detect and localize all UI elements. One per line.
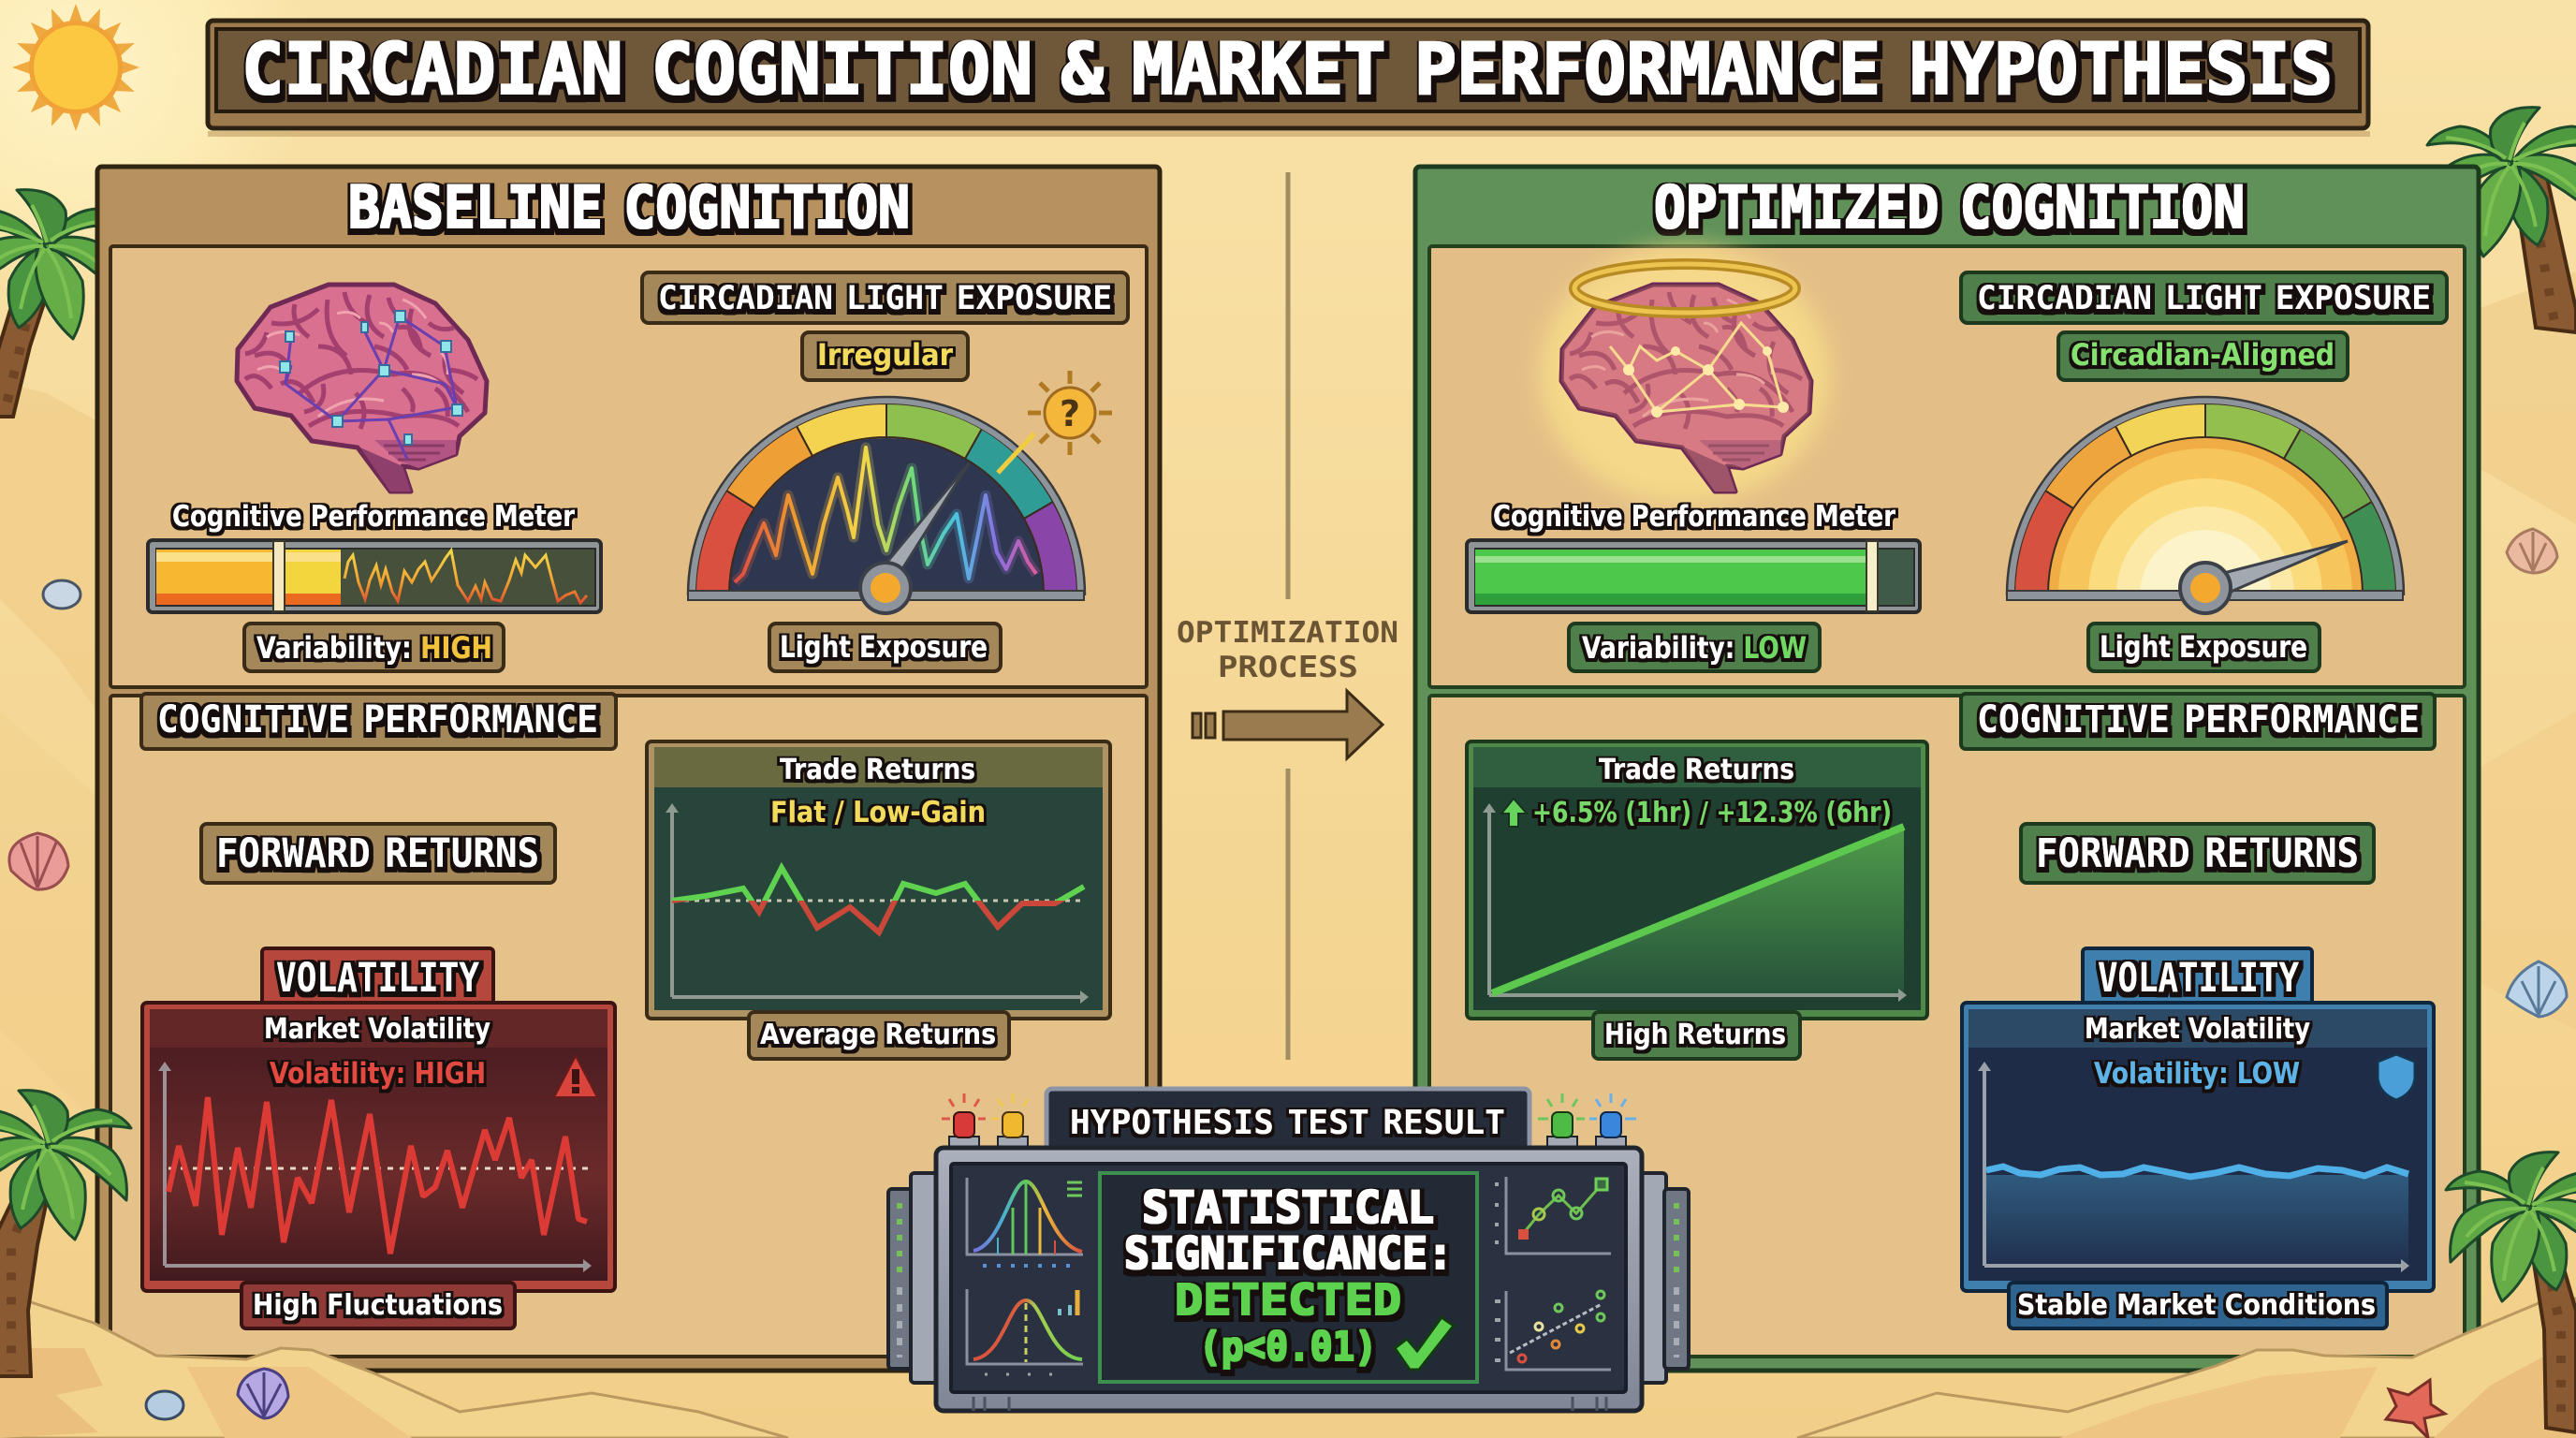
pill: high returns: High Returns [1604, 1019, 1786, 1051]
shell: blue-grey bottom [146, 1391, 183, 1419]
chart: market volatility low [1962, 1003, 2434, 1291]
statistical significance screen: DETECTED [1175, 1275, 1401, 1325]
chart: market volatility low: Volatility: LOW [2094, 1057, 2300, 1091]
shell: grey left [43, 580, 80, 609]
pill: high fluctuations [242, 1283, 515, 1328]
mini chart: normal curve [967, 1289, 1083, 1374]
header text: HYPOTHESIS TEST RESULT [1070, 1104, 1505, 1142]
pill: light exposure [769, 624, 1001, 671]
pill: light exposure (optimized) [2088, 624, 2320, 671]
center divider [1286, 172, 1290, 1060]
pill: circadian light exposure: CIRCADIAN LIGHT EXPOSURE [658, 280, 1112, 317]
chart: market volatility low: Market Volatility [2085, 1013, 2310, 1046]
mini chart: line trend [1495, 1177, 1611, 1254]
pill: cognitive performance (optimized): COGNITIVE PERFORMANCE [1977, 698, 2420, 741]
pill: variability low: Variability: LOW [1582, 630, 1807, 666]
header plate [1046, 1089, 1530, 1151]
title text: CIRCADIAN COGNITION & MARKET PERFORMANCE HYPOTHESIS [242, 27, 2333, 110]
mini chart: rainbow bell curve [967, 1178, 1083, 1268]
palm tree: bottom right [2446, 1152, 2576, 1432]
tab: volatility low: VOLATILITY [2098, 955, 2299, 1002]
statistical significance screen [1100, 1173, 1477, 1382]
title banner [208, 21, 2370, 137]
icon: sun [12, 4, 139, 131]
chart: trade returns flat [647, 741, 1110, 1019]
pill: average returns [749, 1012, 1009, 1059]
indicator lights [942, 1093, 1636, 1148]
palm tree: bottom left [0, 1091, 131, 1376]
statistical significance screen: SIGNIFICANCE: [1124, 1228, 1453, 1280]
icon: question sun [1028, 371, 1112, 455]
palm tree: top left [0, 190, 129, 417]
panel: baseline cognition [97, 167, 1160, 1371]
tab: volatility high: VOLATILITY [276, 955, 479, 1002]
chart: trade returns flat: Trade Returns [780, 754, 975, 786]
icon: shield [2378, 1054, 2415, 1100]
side dunes [0, 271, 2576, 1123]
chart: market volatility high [142, 1003, 615, 1291]
shell: purple [238, 1369, 288, 1418]
pill: circadian aligned: Circadian-Aligned [2071, 337, 2334, 373]
label: cognitive performance meter (optimized): Cognitive Performance Meter [1493, 500, 1896, 534]
meter: high variability [148, 540, 601, 612]
icon: check mark [1395, 1317, 1454, 1370]
optimization process label [1177, 616, 1398, 684]
side modules [888, 1173, 1689, 1383]
pill: irregular: Irregular [817, 337, 953, 373]
pill: light exposure (optimized): Light Exposure [2100, 629, 2307, 665]
neural network [285, 316, 457, 459]
icon: warning triangle [554, 1056, 597, 1097]
pill: average returns: Average Returns [760, 1019, 996, 1051]
needle [878, 463, 969, 582]
device: hypothesis test result [888, 1089, 1689, 1411]
pill: variability high: Variability: HIGH [256, 630, 492, 666]
icon: shells and starfish [9, 529, 2567, 1438]
icon: baseline brain [237, 285, 487, 492]
starfish [2386, 1380, 2445, 1438]
halo [1574, 264, 1795, 313]
pill: forward returns (optimized): FORWARD RETURNS [2036, 830, 2359, 877]
chart: trade returns high: +6.5% (1hr) / +12.3% (6hr) [1532, 797, 1892, 829]
shell: blue right [2507, 961, 2567, 1017]
needle [2213, 541, 2348, 595]
icon: optimized brain with halo [1540, 245, 1830, 504]
panel heading: baseline: BASELINE COGNITION [348, 173, 910, 242]
chart: trade returns high: Trade Returns [1599, 754, 1794, 786]
glowing network [1610, 323, 1783, 412]
pill: high fluctuations: High Fluctuations [253, 1289, 503, 1322]
pill: stable market conditions: Stable Market Conditions [2017, 1289, 2376, 1322]
shell: tan right [2507, 529, 2557, 573]
pill: high returns [1593, 1012, 1800, 1059]
pill: light exposure: Light Exposure [780, 629, 988, 665]
icon: up arrow [1501, 799, 1527, 827]
tab: volatility high [262, 948, 493, 1008]
spectral wave [735, 448, 1036, 582]
gauge: aligned light exposure [2007, 397, 2404, 613]
foreground sand dunes [0, 1298, 2576, 1438]
pill: forward returns: FORWARD RETURNS [216, 830, 539, 877]
panel: optimized cognition [1415, 167, 2479, 1371]
label: cognitive performance meter: Cognitive Performance Meter [172, 500, 576, 534]
arrow: optimization [1193, 691, 1383, 758]
chart: market volatility high: Market Volatility [264, 1013, 490, 1046]
tab: volatility low [2083, 948, 2312, 1008]
chart: trade returns high [1467, 741, 1927, 1019]
pill: cognitive performance: COGNITIVE PERFORMANCE [157, 698, 598, 741]
gauge: irregular light exposure [688, 371, 1112, 613]
optimization process label: OPTIMIZATION [1177, 616, 1398, 650]
pill: circadian aligned [2058, 332, 2348, 380]
pill: stable market conditions [2009, 1283, 2387, 1328]
chart: market volatility high: Volatility: HIGH [270, 1057, 486, 1091]
sun glow [0, 0, 310, 301]
optimization process label: PROCESS [1218, 651, 1358, 684]
mini chart: scatter regression [1495, 1291, 1611, 1370]
icon: question sun: ? [1060, 393, 1080, 434]
pill: circadian light exposure (optimized): CIRCADIAN LIGHT EXPOSURE [1977, 280, 2431, 317]
pointer tick [998, 433, 1034, 473]
statistical significance screen: (p<0.01) [1199, 1324, 1377, 1371]
palm tree: top right [2427, 108, 2576, 332]
statistical significance screen: STATISTICAL [1142, 1182, 1434, 1234]
meter: low variability [1467, 540, 1920, 612]
console frame [936, 1148, 1642, 1411]
panel heading: optimized: OPTIMIZED COGNITION [1654, 173, 2245, 242]
pill: irregular [802, 332, 968, 380]
shell: pink left [9, 833, 68, 889]
chart: trade returns flat: Flat / Low-Gain [770, 796, 986, 829]
